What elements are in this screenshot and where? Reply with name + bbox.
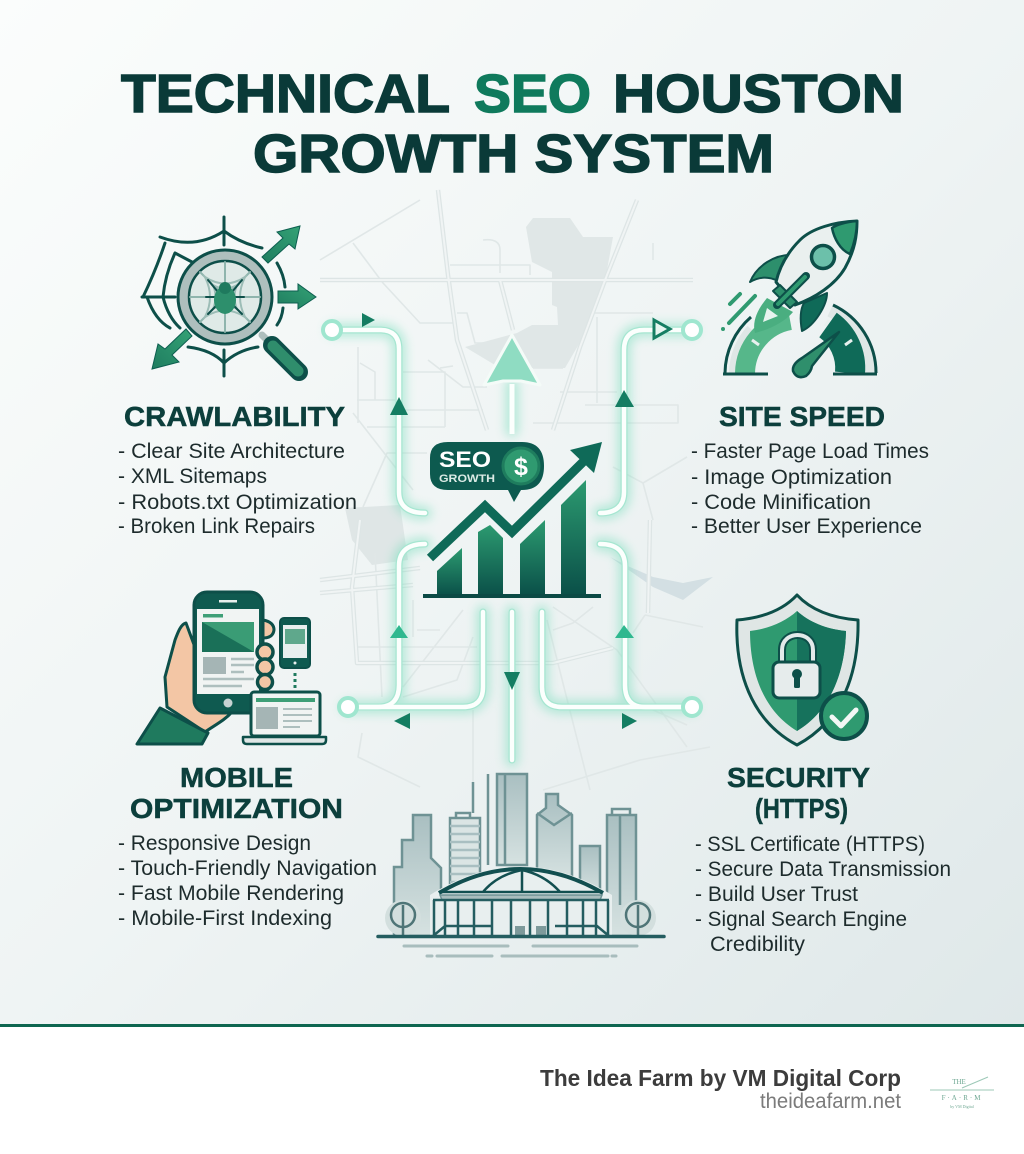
seo growth badge: $: [514, 453, 528, 481]
magnifier handle: [262, 335, 270, 343]
title: GROWTH SYSTEM: [253, 124, 774, 184]
list: mobile optimization: [118, 832, 377, 930]
connector nodes: [323, 321, 701, 716]
icon: mobile devices: [137, 592, 326, 744]
connection dots: [294, 673, 296, 688]
footer band: [0, 1027, 1024, 1154]
heading: mobile optimization: [130, 762, 343, 824]
icon: security shield: [737, 595, 867, 745]
growth arrow: [430, 460, 585, 558]
footer brand text: theideafarm.net: [760, 1090, 901, 1113]
chart bars: [437, 480, 586, 596]
footer divider: [0, 1024, 1024, 1027]
icon: rocket over speedometer: [721, 221, 877, 377]
list: mobile optimization: - Responsive Design: [118, 832, 311, 855]
title: TECHNICAL: [121, 64, 450, 124]
speedometer needle: [793, 332, 839, 377]
list: security: - Build User Trust: [695, 883, 858, 906]
list: site speed: [691, 440, 929, 538]
spider: [206, 280, 244, 314]
seo growth badge: SEO: [439, 447, 491, 472]
list: crawlability: - Clear Site Architecture: [118, 440, 345, 463]
sleeve: [137, 708, 208, 744]
list: crawlability: - XML Sitemaps: [118, 465, 267, 488]
magnifier lens: [183, 255, 267, 339]
houston skyline: [378, 774, 664, 956]
list: mobile optimization: - Fast Mobile Rendering: [118, 882, 344, 905]
padlock: [782, 635, 813, 663]
heading: security: [727, 762, 870, 824]
heading: security: (HTTPS): [755, 793, 848, 824]
connector paths: [333, 330, 691, 760]
trees: [385, 900, 656, 936]
center growth chart: [423, 442, 602, 598]
list: security: Credibility: [710, 933, 806, 956]
footer logo: [930, 1077, 994, 1109]
web strands: [142, 217, 285, 376]
list: security: - Secure Data Transmission: [695, 858, 951, 881]
fingers: [263, 620, 274, 638]
list: crawlability: - Broken Link Repairs: [118, 515, 315, 538]
footer brand text: The Idea Farm by VM Digital Corp: [540, 1065, 901, 1091]
flow arrowheads: [362, 313, 670, 729]
phone: [194, 592, 263, 713]
list: security: - SSL Certificate (HTTPS): [695, 833, 925, 856]
rocket body: [776, 221, 857, 305]
speed lines: [729, 294, 755, 323]
list: site speed: - Image Optimization: [691, 466, 892, 489]
heading: crawlability: CRAWLABILITY: [124, 401, 345, 432]
chart baseline: [423, 594, 601, 598]
list: site speed: - Better User Experience: [691, 515, 922, 538]
list: security: - Signal Search Engine: [695, 908, 907, 931]
list: site speed: - Faster Page Load Times: [691, 440, 929, 463]
connector core: [333, 330, 691, 760]
heading: mobile optimization: OPTIMIZATION: [130, 793, 343, 824]
title: HOUSTON: [613, 64, 904, 124]
check badge: [821, 693, 867, 739]
list: mobile optimization: - Touch-Friendly Navigation: [118, 857, 377, 880]
icon: spider web magnifier: [142, 217, 299, 376]
major roads: [320, 190, 693, 663]
footer logo: by VM Digital: [950, 1104, 975, 1109]
footer logo: THE: [952, 1078, 966, 1086]
seo growth badge: [430, 442, 544, 502]
rocket fins: [750, 255, 790, 282]
list: mobile optimization: - Mobile-First Indexing: [118, 907, 332, 930]
list: crawlability: - Robots.txt Optimization: [118, 491, 357, 514]
laptop: [251, 692, 320, 736]
hand: [165, 623, 232, 732]
footer logo: F·A·R·M: [942, 1094, 982, 1102]
central up arrow: [484, 335, 540, 434]
title: [121, 64, 904, 184]
heading: site speed: SITE SPEED: [719, 401, 885, 432]
speedometer gauge: [723, 305, 877, 374]
seo growth badge: GROWTH: [439, 473, 495, 485]
ground line: [378, 935, 664, 938]
connector outline: [333, 330, 691, 760]
rocket flame: [754, 298, 793, 333]
city map backdrop: [320, 190, 713, 790]
heading: security: SECURITY: [727, 762, 870, 793]
heading: mobile optimization: MOBILE: [180, 762, 293, 793]
small phone: [280, 618, 310, 668]
list: security: [695, 833, 951, 956]
icon: growth arrows: [152, 226, 316, 369]
list: crawlability: [118, 440, 357, 538]
list: site speed: - Code Minification: [691, 491, 871, 514]
connector glow: [333, 330, 691, 760]
dome stadium: [430, 866, 612, 936]
title: SEO: [474, 64, 591, 124]
footer brand text: [540, 1065, 901, 1113]
